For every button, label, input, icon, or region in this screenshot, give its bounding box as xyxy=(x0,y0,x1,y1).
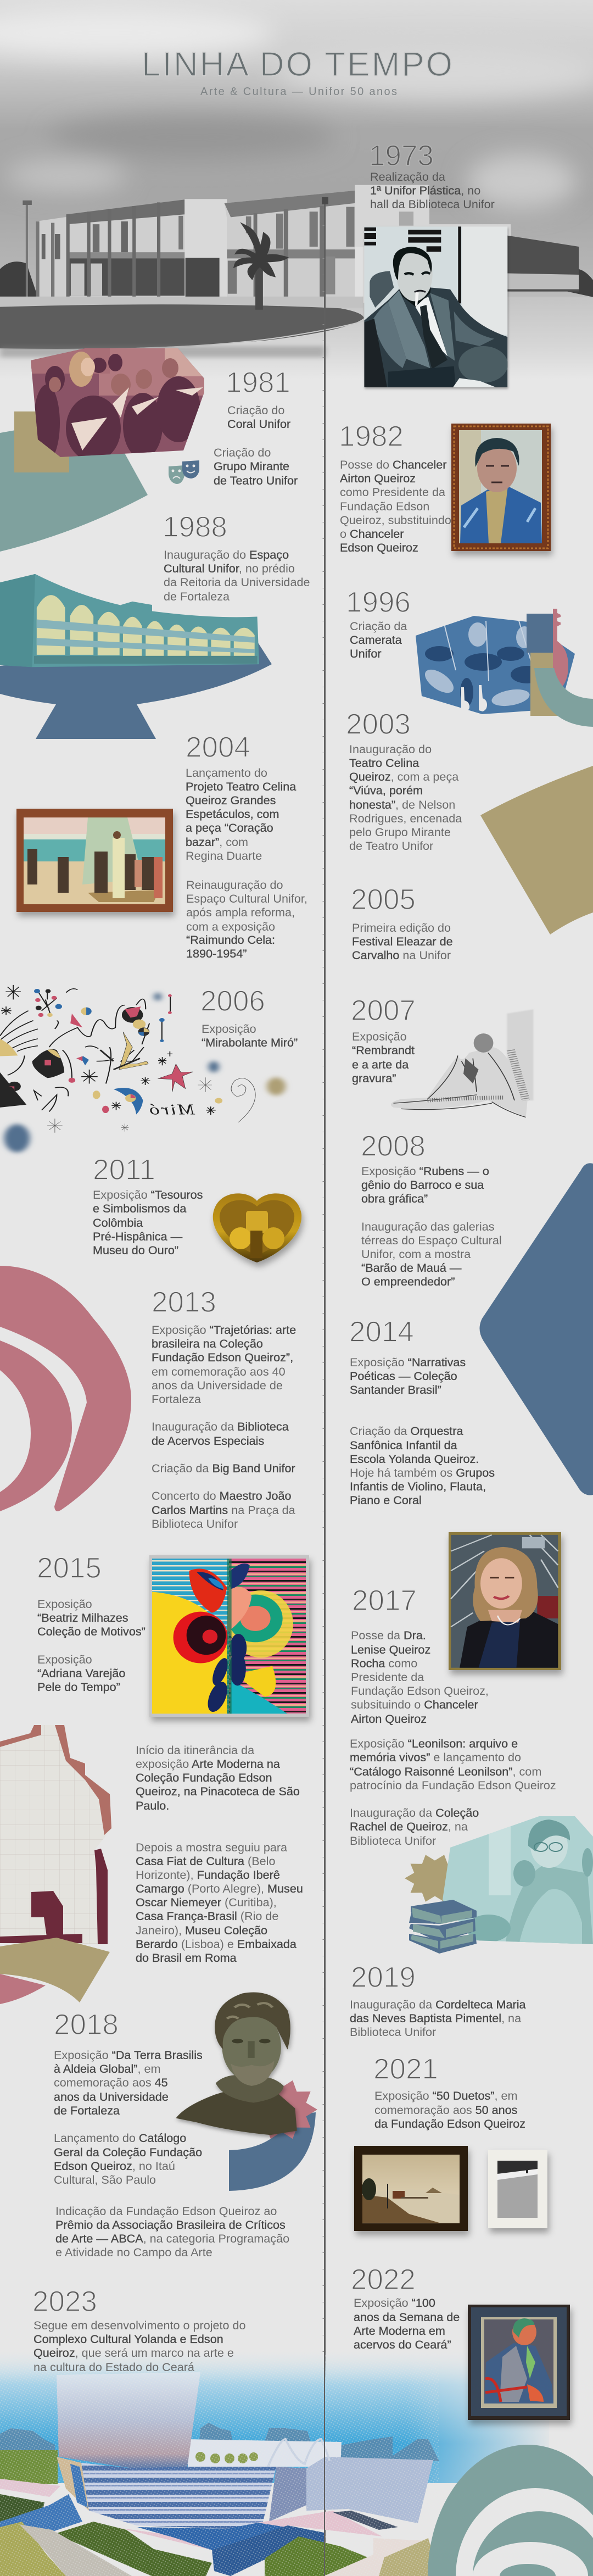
text 2015: “Adriana Varejão xyxy=(37,1666,125,1680)
illustration: Espaço Cultural building xyxy=(0,574,259,667)
illustration: Miró motif: Miró xyxy=(149,1101,195,1118)
timeline axis xyxy=(322,197,328,2576)
teal arc xyxy=(534,668,593,727)
photo: musicians xyxy=(416,616,575,714)
text 1996 xyxy=(350,619,407,660)
panel: 2014 xyxy=(349,1316,495,1507)
painting: Beatriz Milhazes xyxy=(149,1555,309,1717)
panel: 1982 xyxy=(339,420,451,554)
text 2013: Inauguração da Biblioteca xyxy=(152,1420,289,1433)
text: Arte Moderna: Coleção Fundação Edson xyxy=(136,1771,272,1784)
text 2023: Complexo Cultural Yolanda e Edson xyxy=(33,2332,223,2346)
panel: 1981 xyxy=(0,346,298,552)
painting: harbour landscape xyxy=(354,2146,468,2231)
image: Complexo Cultural render xyxy=(0,2346,593,2576)
photo: Rachel de Queiroz xyxy=(439,1813,593,1948)
panel: 1973 xyxy=(369,140,495,211)
text 2004 xyxy=(186,766,296,863)
text 2007 xyxy=(352,1030,415,1085)
illustration: Miró motif xyxy=(0,985,286,1152)
subtitle: Arte & Cultura — Unifor 50 anos xyxy=(200,86,397,98)
text 2008: obra gráfica” xyxy=(361,1192,428,1205)
icon: violin xyxy=(553,609,568,692)
text 2015: “Beatriz Milhazes xyxy=(37,1611,128,1624)
text 2006: Exposição xyxy=(202,1022,256,1036)
text 2018: Prêmio da Associação Brasileira de Críticos xyxy=(55,2218,286,2232)
text 1988: de Fortaleza xyxy=(164,589,230,603)
text 2013: Concerto do Maestro João xyxy=(152,1489,291,1503)
text 2017: Airton Queiroz xyxy=(351,1712,427,1726)
panel: 1973: hall da Biblioteca Unifor xyxy=(370,197,495,211)
text 2017: “Catálogo Raisonné Leonilson”, com xyxy=(350,1765,541,1778)
text 2013: Biblioteca Unifor xyxy=(152,1517,238,1531)
text 2003: Queiroz, com a peça xyxy=(349,770,459,783)
text 2006 xyxy=(202,1022,298,1049)
year 2019: 2019 xyxy=(351,1961,416,1994)
text 2004: Projeto Teatro Celina xyxy=(186,780,296,793)
panel: 2015 xyxy=(37,1552,309,1717)
text: Reinauguração: Reinauguração do xyxy=(186,878,283,892)
year 1981 xyxy=(226,366,290,431)
text 2013: anos da Universidade de xyxy=(152,1378,283,1392)
text 2021 xyxy=(374,2089,525,2130)
text: Coral Unifor: Coral Unifor xyxy=(227,417,290,431)
text 2017: Presidente da xyxy=(351,1670,424,1684)
text 2013 xyxy=(152,1323,296,1531)
text 2019: das Neves Baptista Pimentel, na xyxy=(350,2011,522,2025)
painting: modernist portrait xyxy=(468,2305,570,2420)
text 2018: de Fortaleza xyxy=(54,2104,120,2117)
text 2017: Lenise Queiroz xyxy=(351,1643,430,1656)
artwork: Varejão tiles xyxy=(0,1725,111,1944)
panel: 2006 xyxy=(0,985,298,1152)
text 1982: Fundação Edson xyxy=(340,499,429,513)
text 2014: Hoje há também os Grupos xyxy=(350,1466,495,1479)
text 2007: e a arte da xyxy=(352,1058,409,1071)
text: Arte Moderna: Janeiro), Museu Coleção xyxy=(136,1923,267,1937)
text 1982: como Presidente da xyxy=(340,485,446,499)
panel: 2003 xyxy=(346,708,462,853)
text 2015 xyxy=(37,1597,146,1694)
panel: 1973: 1ª Unifor Plástica, no xyxy=(370,183,480,197)
text 2018: comemoração aos 45 xyxy=(54,2076,168,2089)
text: Arte Moderna: Casa França-Brasil (Rio de xyxy=(136,1909,278,1923)
text 1982: Posse do Chanceler xyxy=(340,458,446,471)
text 2013: brasileira na Coleção xyxy=(152,1337,263,1350)
year 2011: 2011 xyxy=(93,1154,155,1186)
text 2018: Lançamento do Catálogo xyxy=(54,2131,186,2145)
tan shape right xyxy=(480,766,593,934)
text 2013: de Acervos Especiais xyxy=(152,1434,264,1448)
pink star xyxy=(246,2080,317,2139)
text 2017: Exposição “Leonilson: arquivo e xyxy=(350,1737,518,1750)
text 2022 xyxy=(354,2296,460,2351)
text 2003: honesta”, de Nelson xyxy=(349,798,455,811)
text 2006: “Mirabolante Miró” xyxy=(202,1036,298,1049)
text 2008: gênio do Barroco e sua xyxy=(361,1178,484,1192)
panel: 2011 xyxy=(93,1154,301,1262)
photo: Lenise Queiroz Rocha xyxy=(449,1532,561,1670)
text: Arte Moderna: Berardo (Lisboa) e Embaixada xyxy=(136,1937,297,1951)
text 2017: patrocínio da Fundação Edson Queiroz xyxy=(350,1778,556,1792)
text 2014: Sanfônica Infantil da xyxy=(350,1438,458,1452)
text: Rachel: Rachel de Queiroz, na xyxy=(350,1820,468,1833)
text: Rachel: Biblioteca Unifor xyxy=(350,1834,436,1848)
text 2022: anos da Semana de xyxy=(354,2310,460,2324)
text 2013: em comemoração aos 40 xyxy=(152,1365,286,1378)
pink shape xyxy=(0,1974,46,2004)
text 2007: gravura” xyxy=(352,1071,396,1085)
text 1996: Criação da xyxy=(350,619,407,633)
text 2011: Museu do Ouro” xyxy=(93,1243,178,1257)
text: Grupo Mirante xyxy=(214,446,298,487)
teal concentric arches xyxy=(428,2445,593,2576)
etching: Rembrandt figure xyxy=(391,1009,533,1117)
text 1988 xyxy=(164,548,310,603)
year 2017: 2017 xyxy=(352,1584,417,1617)
header photo: university building xyxy=(0,0,593,379)
text: Rachel xyxy=(350,1806,479,1848)
text 2022: Arte Moderna em xyxy=(354,2324,445,2338)
panel: 2022 xyxy=(351,2263,570,2420)
text 1982: Airton Queiroz xyxy=(340,471,416,485)
panel: 2004 xyxy=(186,731,307,960)
panel: 2016-17 itinerary xyxy=(0,1725,303,2004)
text 2013: Fortaleza xyxy=(152,1392,202,1406)
text: Grupo Mirante: Grupo Mirante xyxy=(214,459,289,473)
text 2005 xyxy=(352,921,453,962)
text 2018 xyxy=(54,2048,289,2259)
text 2003: de Teatro Unifor xyxy=(349,839,433,853)
text 2004: bazar”, com xyxy=(186,835,248,849)
text 2004: Queiroz Grandes xyxy=(186,793,276,807)
text: Coral Unifor xyxy=(227,403,290,431)
text 2004: Regina Duarte xyxy=(186,849,262,863)
year 1982: 1982 xyxy=(339,420,404,453)
year 1996: 1996 xyxy=(346,586,411,619)
text 2017: Posse da Dra. xyxy=(351,1628,426,1642)
tan shape xyxy=(0,1938,110,2002)
text 2011: Colômbia xyxy=(93,1216,143,1229)
text 2014: Exposição “Narrativas xyxy=(350,1355,466,1369)
text 1988: Inauguração do Espaço xyxy=(164,548,289,561)
panel: 2008 xyxy=(361,1130,502,1288)
year 2021: 2021 xyxy=(373,2053,438,2085)
text 1982: o Chanceler xyxy=(340,527,404,541)
text 2018: Geral da Coleção Fundação xyxy=(54,2145,202,2159)
tan square xyxy=(14,411,69,472)
text: Grupo Mirante: de Teatro Unifor xyxy=(214,474,298,487)
text 2017: memória vivos” e lançamento do xyxy=(350,1750,521,1764)
axis overlay at bottom xyxy=(324,2351,325,2576)
text 2011: Exposição “Tesouros xyxy=(93,1188,203,1201)
text 2018: Indicação da Fundação Edson Queiroz ao xyxy=(55,2204,277,2218)
text 2008: térreas do Espaço Cultural xyxy=(361,1233,502,1247)
panel: 2017 xyxy=(350,1532,561,1792)
text 2018: Cultural, São Paulo xyxy=(54,2173,156,2186)
panel: 2023 bottom render xyxy=(0,2285,593,2576)
text 2018: de Arte — ABCA, na categoria Programação xyxy=(55,2232,289,2245)
text: Reinauguração: “Raimundo Cela: xyxy=(186,933,275,947)
text 2003: pelo Grupo Mirante xyxy=(349,825,451,839)
text: Arte Moderna: Início da itinerância da xyxy=(136,1743,255,1757)
text 1973: Realização da xyxy=(370,170,446,183)
text: Reinauguração: após ampla reforma, xyxy=(186,905,295,919)
year 2014: 2014 xyxy=(349,1316,414,1348)
blue pedestal bowl xyxy=(0,643,272,739)
text: Arte Moderna: Depois a mostra seguiu para xyxy=(136,1840,288,1854)
text 2021: comemoração aos 50 anos xyxy=(374,2103,518,2117)
text 1996: Unifor xyxy=(350,647,382,660)
text 2014: Infantis de Violino, Flauta, xyxy=(350,1479,486,1493)
year 2023: 2023 xyxy=(32,2285,97,2318)
panel: 2019 xyxy=(350,1961,527,2039)
icon: stack of books xyxy=(409,1900,477,1954)
text 2015: Pele do Tempo” xyxy=(37,1680,120,1694)
text 2011: e Simbolismos da xyxy=(93,1201,187,1215)
text 2018: Exposição “Da Terra Brasilis xyxy=(54,2048,203,2062)
text: Reinauguração: com a exposição xyxy=(186,920,275,933)
text 1982: Edson Queiroz xyxy=(340,541,418,554)
panel: 1996 xyxy=(346,586,593,727)
text 2003: Rodrigues, encenada xyxy=(349,811,462,825)
text 2007: Exposição xyxy=(352,1030,407,1043)
teal background shape xyxy=(0,430,148,552)
panel: 1988 xyxy=(0,511,310,739)
blue arc xyxy=(229,2112,316,2191)
text: Grupo Mirante: Criação do xyxy=(214,446,271,459)
text 2008 xyxy=(361,1164,502,1288)
text 2013: Carlos Martins na Praça da xyxy=(152,1503,296,1517)
text 2019 xyxy=(350,1998,527,2039)
text: Arte Moderna: Oscar Niemeyer (Curitiba), xyxy=(136,1895,277,1909)
text 1988: Cultural Unifor, no prédio xyxy=(164,561,295,575)
text 2013: Fundação Edson Queiroz”, xyxy=(152,1350,293,1364)
photo: choir xyxy=(27,346,209,461)
text 2005: Carvalho na Unifor xyxy=(352,948,451,962)
photograph: white framed xyxy=(488,2150,547,2228)
text 2017: Fundação Edson Queiroz, xyxy=(351,1684,489,1698)
pink concentric arcs xyxy=(0,1266,131,1511)
text: Coral Unifor: Criação do xyxy=(227,403,284,417)
text 2015: Coleção de Motivos” xyxy=(37,1624,146,1638)
year 1981: 1981 xyxy=(226,366,290,399)
text: Reinauguração: Espaço Cultural Unifor, xyxy=(186,892,307,905)
panel: 2007 xyxy=(351,994,533,1117)
year 1988: 1988 xyxy=(163,511,227,543)
text 2004: Lançamento do xyxy=(186,766,267,780)
text: Reinauguração xyxy=(186,878,307,960)
text 2003: Teatro Celina xyxy=(349,756,419,770)
panel: 2021 xyxy=(354,2053,547,2231)
year 2004: 2004 xyxy=(186,731,250,764)
text 2005: Primeira edição do xyxy=(352,921,451,934)
text 2022: acervos do Ceará” xyxy=(354,2338,451,2351)
text 2018: anos da Universidade xyxy=(54,2090,169,2104)
text 2018: e Atividade no Campo da Arte xyxy=(55,2245,212,2259)
panel: 2005 xyxy=(351,883,453,962)
text 1996: Camerata xyxy=(350,633,402,647)
text: Arte Moderna: Queiroz, na Pinacoteca de São xyxy=(136,1784,300,1798)
text 2011 xyxy=(93,1188,203,1257)
text 2019: Biblioteca Unifor xyxy=(350,2025,436,2039)
icon: theatre masks xyxy=(169,460,199,484)
text 2022: Exposição “100 xyxy=(354,2296,435,2310)
text 2015: Exposição xyxy=(37,1653,92,1666)
text 2003: “Viúva, porém xyxy=(349,783,423,797)
text: Reinauguração: 1890-1954” xyxy=(186,947,247,960)
text 2011: Pré-Hispânica — xyxy=(93,1229,183,1243)
icon: gold artefact xyxy=(213,1193,301,1262)
text 2023: Segue em desenvolvimento o projeto do xyxy=(33,2318,246,2332)
text 2008: Unifor, com a mostra xyxy=(361,1247,471,1261)
year 2022: 2022 xyxy=(351,2263,416,2296)
text 2014: Escola Yolanda Queiroz. xyxy=(350,1452,479,1466)
year 2003: 2003 xyxy=(346,708,411,741)
text 2013: Criação da Big Band Unifor xyxy=(152,1461,295,1475)
painting: Airton Queiroz portrait xyxy=(451,424,551,551)
text 2013: Exposição “Trajetórias: arte xyxy=(152,1323,296,1337)
text 2018: Edson Queiroz, no Itaú xyxy=(54,2159,175,2173)
panel: Coleção Rachel de Queiroz xyxy=(350,1806,593,1954)
text 2023 xyxy=(33,2318,246,2374)
year 2008: 2008 xyxy=(361,1130,426,1162)
text 2018: à Aldeia Global”, em xyxy=(54,2062,160,2076)
text 2021: da Fundação Edson Queiroz xyxy=(374,2117,525,2130)
text: Arte Moderna xyxy=(136,1743,303,1965)
blue shape right xyxy=(479,1163,593,1495)
text 2023: Queiroz, que será um marco na arte e xyxy=(33,2346,234,2360)
text 2014: Santander Brasil” xyxy=(350,1383,441,1397)
sculpture: bronze bust xyxy=(176,1993,297,2135)
text 2021: Exposição “50 Duetos”, em xyxy=(374,2089,517,2102)
decorative shapes: blue and tan rectangles xyxy=(527,614,558,716)
text: Rachel: Inauguração da Coleção xyxy=(350,1806,479,1820)
text 2017: subsituindo o Chanceler xyxy=(351,1698,478,1711)
text: Arte Moderna: Camargo (Porto Alegre), Museu xyxy=(136,1882,303,1895)
text 2014: Poéticas — Coleção xyxy=(350,1369,457,1383)
text 2008: Inauguração das galerias xyxy=(361,1220,495,1233)
text 2008: O empreendedor” xyxy=(361,1275,455,1288)
text: Arte Moderna: Casa Fiat de Cultura (Belo xyxy=(136,1854,275,1868)
text 2008: Exposição “Rubens — o xyxy=(361,1164,489,1178)
text 2017 xyxy=(350,1628,556,1792)
text 2008: “Barão de Mauá — xyxy=(361,1261,462,1275)
text 2017: Rocha como xyxy=(351,1656,417,1670)
text 1982 xyxy=(340,458,451,554)
text 1982: Queiroz, substituindo xyxy=(340,513,451,527)
text 2014: Criação da Orquestra xyxy=(350,1424,463,1438)
text 2003: Inauguração do xyxy=(349,742,432,756)
title: LINHA DO TEMPO xyxy=(142,46,452,84)
text 2014: Piano e Coral xyxy=(350,1493,422,1507)
text 2015: Exposição xyxy=(37,1597,92,1611)
year 2013: 2013 xyxy=(152,1286,216,1318)
text 2023: na cultura do Estado do Ceará xyxy=(33,2360,195,2374)
text: Arte Moderna: exposição Arte Moderna na xyxy=(136,1757,281,1771)
text 2019: Inauguração da Cordelteca Maria xyxy=(350,1998,527,2011)
text 2014 xyxy=(350,1355,495,1507)
text: Arte Moderna: do Brasil em Roma xyxy=(136,1951,237,1965)
text 2005: Festival Eleazar de xyxy=(352,934,453,948)
year 2005: 2005 xyxy=(351,883,416,916)
tan star xyxy=(405,1855,465,1902)
photo: Edson Queiroz portrait xyxy=(364,226,508,387)
year 2007: 2007 xyxy=(351,994,416,1027)
year 2015: 2015 xyxy=(37,1552,102,1584)
text 2003 xyxy=(349,742,462,853)
painting: Raimundo Cela xyxy=(16,809,173,912)
year 2018: 2018 xyxy=(54,2008,119,2041)
text: Arte Moderna: Horizonte), Fundação Iberê xyxy=(136,1868,280,1882)
text 2004: Espetáculos, com xyxy=(186,807,279,821)
text 1988: da Reitoria da Universidade xyxy=(164,575,310,589)
text 2004: a peça “Coração xyxy=(186,821,273,834)
year 1973: 1973 xyxy=(369,140,434,172)
panel: 2018 xyxy=(54,1993,317,2259)
text 2007: “Rembrandt xyxy=(352,1043,415,1057)
panel: 2013 xyxy=(0,1266,296,1531)
icon: music notes xyxy=(461,685,487,711)
text: Arte Moderna: Paulo. xyxy=(136,1799,169,1812)
year 2006: 2006 xyxy=(200,985,265,1017)
